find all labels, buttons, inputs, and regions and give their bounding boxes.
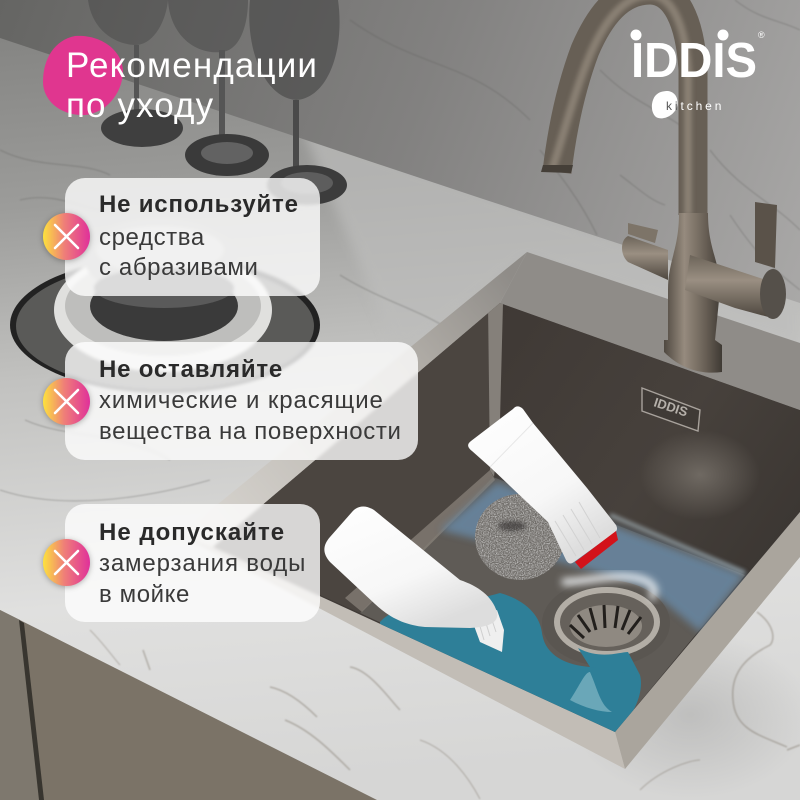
card: abrasives: с абразивами [99,254,259,281]
sink rim [180,252,800,769]
drain [554,587,660,675]
cleaner bottle [324,506,504,652]
dark plate [10,257,320,393]
glass bowl [84,218,238,341]
title [66,46,318,125]
counter right shade [570,631,800,799]
logo: ® [758,30,765,40]
wine glass right [249,0,347,205]
card: abrasives [65,178,320,296]
icon: cross [40,376,93,430]
sink logo plate: IDDIS [652,395,690,420]
card: abrasives: средства [99,224,205,251]
card: chemicals [65,342,418,460]
card: freezing: в мойке [99,581,190,608]
card: abrasives: Не используйте [99,191,299,218]
card: freezing [65,504,320,622]
heading blob [43,36,123,115]
wine glass middle [168,0,269,176]
card: chemicals: вещества на поверхности [99,418,402,445]
faucet [541,0,786,373]
title: по уходу [66,86,214,125]
logo [630,30,765,118]
sink logo plate [642,388,700,431]
drain plate [610,580,668,612]
wall [0,0,800,303]
wine glass left [88,0,183,147]
powder bottle [468,406,618,569]
logo: IDDIS [631,34,757,88]
white plate [54,248,272,372]
counter veins [90,612,800,799]
title: Рекомендации [66,46,318,85]
water spill [380,593,641,733]
card: freezing: Не допускайте [99,519,285,546]
steel scourer [475,494,565,580]
icon: cross [40,537,93,590]
card: freezing: замерзания воды [99,550,306,577]
logo: kitchen [666,99,724,113]
card: chemicals: Не оставляйте [99,356,283,383]
card: chemicals: химические и красящие [99,387,384,414]
residue film [440,482,745,632]
cabinet [0,610,377,800]
counter back light [300,125,800,360]
sink basin [214,303,800,732]
icon: cross [40,211,93,264]
powder [562,577,654,598]
marble veins [0,0,800,501]
